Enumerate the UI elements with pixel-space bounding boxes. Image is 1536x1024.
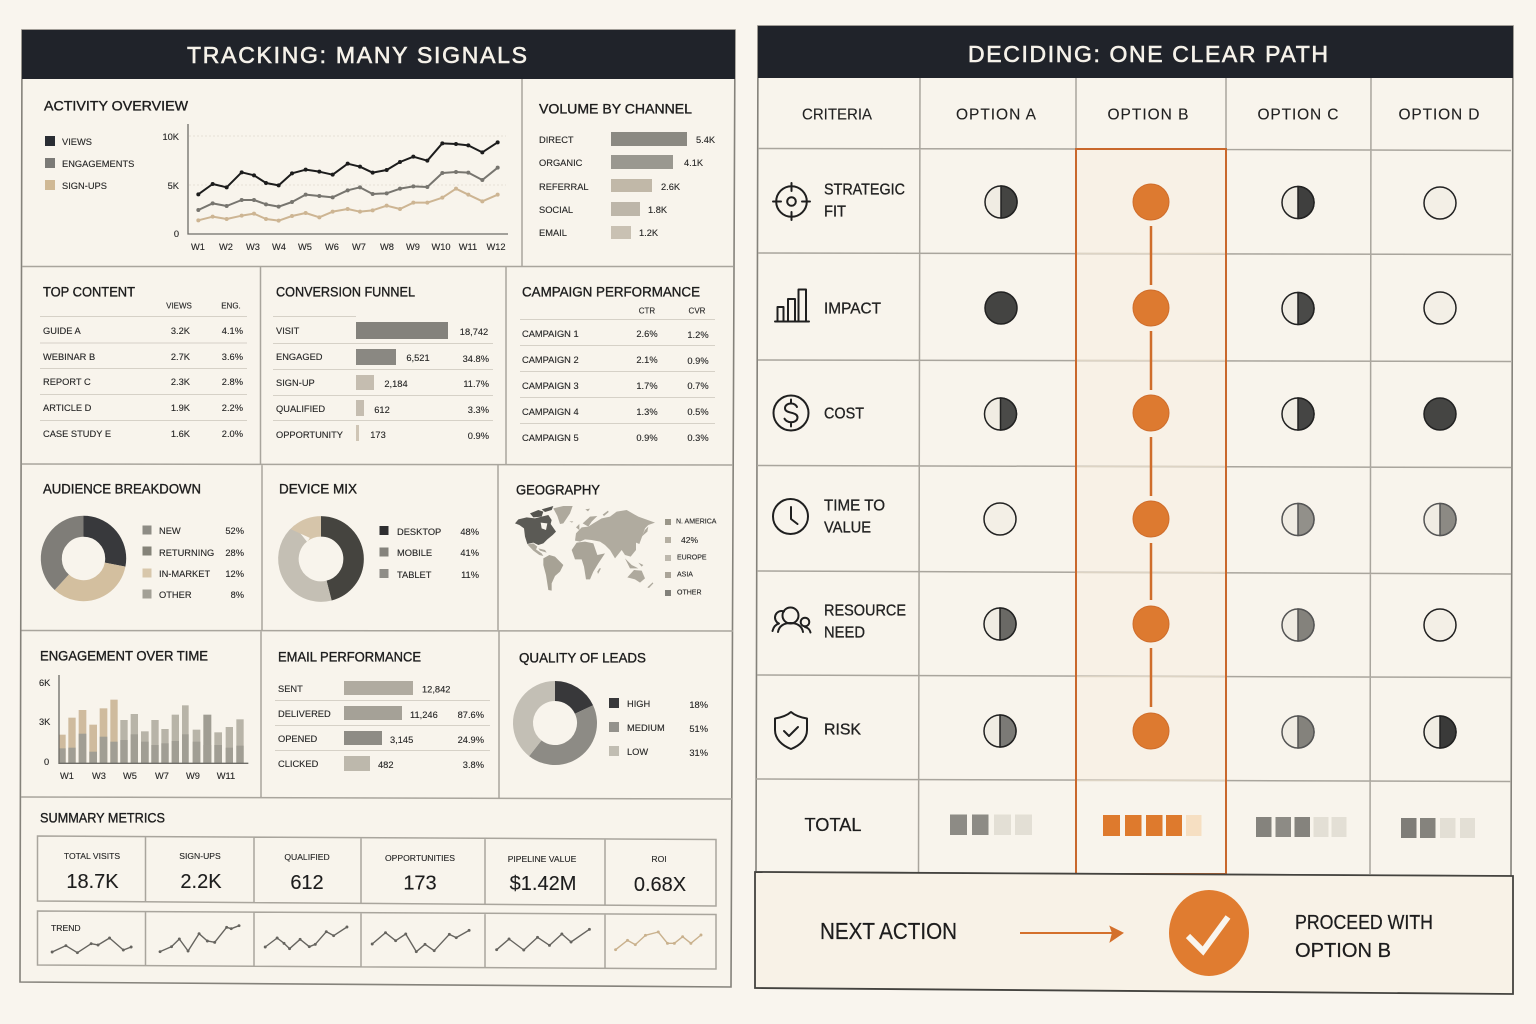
legend: audience: OTHER bbox=[159, 590, 192, 600]
path: option B connector bbox=[1150, 226, 1152, 707]
panel: tracking bbox=[20, 30, 735, 987]
line chart: activity: W3 bbox=[246, 242, 260, 252]
legend: activity: VIEWS bbox=[62, 137, 92, 147]
panel: email performance bbox=[275, 650, 490, 771]
panel: engagement over time bbox=[39, 648, 248, 781]
bars: email: DELIVERED bbox=[278, 709, 331, 719]
table: campaigns: 1.7% bbox=[636, 381, 658, 391]
legend: leads: HIGH bbox=[627, 699, 650, 709]
table: campaigns: 0.9% bbox=[687, 356, 709, 366]
funnel bars: 2,184 bbox=[384, 379, 408, 389]
label: cost: COST bbox=[824, 406, 864, 422]
icon: people bbox=[772, 608, 810, 632]
line chart: activity: W6 bbox=[325, 242, 339, 252]
line chart: activity: W5 bbox=[298, 242, 312, 252]
panel: conversion funnel bbox=[273, 284, 493, 441]
bars: channels: 5.4K bbox=[696, 135, 716, 145]
line chart: activity: W7 bbox=[352, 242, 366, 252]
label: strategic fit: STRATEGIC bbox=[824, 182, 905, 198]
donut: audience bbox=[38, 513, 129, 604]
funnel bars: 34.8% bbox=[463, 354, 489, 364]
metric tiles: 0.68X bbox=[634, 874, 686, 896]
bars: channels: EMAIL bbox=[539, 228, 567, 238]
column headers: OPTION A bbox=[956, 106, 1037, 124]
funnel bars: 6,521 bbox=[406, 353, 430, 363]
heading: deciding: DECIDING: ONE CLEAR PATH bbox=[968, 41, 1328, 67]
metric tiles: ROI bbox=[651, 854, 667, 864]
donut: leads bbox=[510, 678, 600, 768]
table: top content: 2.8% bbox=[222, 377, 243, 387]
criterion: impact bbox=[775, 290, 882, 322]
table: campaigns: 0.7% bbox=[687, 381, 709, 391]
legend: leads bbox=[609, 698, 708, 758]
legend: leads: 18% bbox=[689, 700, 708, 710]
legend: activity bbox=[45, 136, 134, 191]
metric tiles: QUALIFIED bbox=[284, 852, 330, 862]
icon: clock bbox=[773, 499, 808, 534]
legend: activity: SIGN-UPS bbox=[62, 181, 107, 191]
world map bbox=[515, 506, 655, 591]
table: top content: VIEWS bbox=[166, 302, 192, 310]
donut: device bbox=[275, 513, 367, 605]
legend: device: 11% bbox=[461, 570, 479, 580]
bar chart: engagement bbox=[39, 675, 248, 781]
legend: device: TABLET bbox=[397, 570, 432, 580]
bars: email: 12,842 bbox=[422, 684, 450, 694]
label: time to value: TIME TO bbox=[824, 498, 885, 514]
line chart: activity bbox=[162, 124, 508, 252]
criterion: risk bbox=[775, 712, 862, 749]
legend: audience: 8% bbox=[231, 590, 244, 600]
icon: dollar bbox=[774, 396, 808, 430]
rating dots: option B bbox=[1133, 184, 1169, 749]
table: top content: 3.2K bbox=[171, 326, 191, 336]
legend: audience: RETURNING bbox=[159, 548, 214, 558]
legend: geography: 42% bbox=[681, 535, 698, 545]
bars: email bbox=[275, 681, 490, 771]
funnel bars: QUALIFIED bbox=[276, 404, 325, 414]
table: campaigns: 1.3% bbox=[636, 407, 658, 417]
table: campaigns: 2.6% bbox=[636, 329, 658, 339]
line chart: activity: W1 bbox=[191, 242, 205, 252]
criterion: resource need bbox=[772, 602, 906, 642]
label: resource need: NEED bbox=[824, 624, 865, 642]
panel: volume by channel bbox=[539, 102, 716, 239]
funnel bars: 3.3% bbox=[468, 405, 489, 415]
funnel bars: SIGN-UP bbox=[276, 378, 315, 388]
label: resource need: RESOURCE bbox=[824, 602, 906, 620]
label: risk: RISK bbox=[824, 722, 862, 738]
legend: audience: 52% bbox=[225, 526, 244, 536]
metric tiles bbox=[38, 836, 716, 906]
table: top content: 2.3K bbox=[171, 377, 191, 387]
label: strategic fit bbox=[824, 182, 905, 220]
line chart: activity: W9 bbox=[406, 242, 420, 252]
decision grid lines bbox=[756, 78, 1511, 874]
table: campaigns: CTR bbox=[639, 306, 655, 316]
table: top content: 2.2% bbox=[222, 403, 243, 413]
table: top content: ENG. bbox=[221, 302, 241, 310]
legend: geography: OTHER bbox=[677, 590, 702, 596]
legend: audience: 28% bbox=[225, 548, 244, 558]
funnel bars bbox=[273, 316, 493, 441]
metric tiles: OPPORTUNITIES bbox=[385, 853, 455, 863]
table: top content: GUIDE A bbox=[43, 326, 82, 336]
recommendation text bbox=[1295, 912, 1433, 962]
legend: leads: 51% bbox=[689, 724, 708, 734]
legend: geography: EUROPE bbox=[677, 554, 707, 562]
highlight column fill: option B bbox=[1076, 149, 1226, 780]
trend sparklines: TREND bbox=[51, 923, 81, 933]
table: campaigns: 0.9% bbox=[636, 433, 658, 443]
column headers bbox=[802, 106, 1480, 124]
bars: channels: 2.6K bbox=[661, 182, 681, 192]
legend: leads: 31% bbox=[689, 748, 708, 758]
heading: volume by channel: VOLUME BY CHANNEL bbox=[539, 102, 693, 116]
bars: channels: 4.1K bbox=[684, 158, 704, 168]
legend: audience bbox=[142, 526, 244, 600]
heading: geography: GEOGRAPHY bbox=[516, 482, 600, 498]
legend: geography: ASIA bbox=[677, 572, 693, 578]
table: campaigns: 1.2% bbox=[687, 330, 709, 340]
bar chart: engagement: W3 bbox=[92, 771, 106, 781]
column headers: OPTION B bbox=[1108, 106, 1188, 124]
metric tiles: 18.7K bbox=[66, 871, 119, 893]
panel: campaign performance bbox=[520, 284, 715, 443]
panel: geography bbox=[515, 482, 717, 596]
icon: shield bbox=[775, 712, 807, 749]
table: campaigns: 0.3% bbox=[687, 433, 709, 443]
score: option A bbox=[950, 814, 1032, 835]
metric tiles: SIGN-UPS bbox=[179, 851, 221, 861]
legend: device: DESKTOP bbox=[397, 527, 441, 537]
bar chart: engagement: W9 bbox=[186, 771, 200, 781]
legend: geography bbox=[665, 518, 717, 596]
panel: audience breakdown bbox=[38, 482, 244, 604]
line chart: activity: W4 bbox=[272, 242, 286, 252]
legend: geography: N. AMERICA bbox=[676, 518, 717, 526]
bars: email: 3.8% bbox=[463, 760, 484, 770]
table: campaigns: 0.5% bbox=[687, 407, 709, 417]
tracking header bar bbox=[22, 30, 735, 79]
legend: device bbox=[380, 526, 479, 580]
table: top content: CASE STUDY E bbox=[43, 429, 111, 439]
bar chart: engagement: 3K bbox=[39, 717, 51, 727]
bars: channels bbox=[539, 132, 716, 239]
funnel bars: OPPORTUNITY bbox=[276, 430, 343, 440]
table: campaigns: CAMPAIGN 1 bbox=[522, 329, 579, 339]
recommendation text: PROCEED WITH bbox=[1295, 912, 1433, 934]
bar chart: engagement: W1 bbox=[60, 771, 74, 781]
table: campaigns bbox=[520, 306, 715, 443]
panel: summary metrics bbox=[38, 810, 716, 969]
bars: channels: DIRECT bbox=[539, 135, 574, 145]
table: campaigns: CAMPAIGN 2 bbox=[522, 355, 579, 365]
score: option D bbox=[1401, 818, 1475, 838]
heading: conversion funnel: CONVERSION FUNNEL bbox=[276, 284, 415, 300]
table: top content: 2.7K bbox=[171, 352, 191, 362]
column headers: CRITERIA bbox=[802, 106, 873, 124]
panel: top content bbox=[40, 284, 247, 439]
table: top content: 3.6% bbox=[222, 352, 243, 362]
line chart: activity: W8 bbox=[380, 242, 394, 252]
arrow bbox=[1020, 928, 1122, 940]
line chart: activity: W12 bbox=[486, 242, 506, 252]
column headers: OPTION C bbox=[1258, 106, 1338, 124]
heading: device mix: DEVICE MIX bbox=[279, 482, 357, 496]
table: top content: 4.1% bbox=[222, 326, 243, 336]
score: option C bbox=[1256, 817, 1346, 837]
bars: channels: SOCIAL bbox=[539, 205, 573, 215]
table: top content: WEBINAR B bbox=[43, 352, 95, 362]
line chart: activity: W10 bbox=[431, 242, 451, 252]
table: campaigns: 2.1% bbox=[636, 355, 658, 365]
funnel bars: ENGAGED bbox=[276, 352, 323, 362]
line chart: activity: 5K bbox=[168, 181, 180, 191]
heading: campaign performance: CAMPAIGN PERFORMANCE bbox=[522, 284, 700, 300]
harvey balls: option D bbox=[1424, 187, 1456, 748]
table: top content: 1.9K bbox=[171, 403, 191, 413]
funnel bars: VISIT bbox=[276, 326, 300, 336]
label: time to value bbox=[824, 498, 885, 536]
bars: email: SENT bbox=[278, 684, 303, 694]
table: campaigns: CAMPAIGN 4 bbox=[522, 407, 579, 417]
heading: audience breakdown: AUDIENCE BREAKDOWN bbox=[43, 482, 201, 496]
panel: deciding bbox=[756, 26, 1513, 876]
bar chart: engagement: W5 bbox=[123, 771, 137, 781]
bars: channels: REFERRAL bbox=[539, 182, 589, 192]
panel: next action bbox=[755, 872, 1513, 994]
table: campaigns: CVR bbox=[689, 306, 706, 316]
recommendation text: OPTION B bbox=[1295, 940, 1391, 962]
legend: audience: 12% bbox=[225, 569, 244, 579]
table: campaigns: CAMPAIGN 5 bbox=[522, 433, 579, 443]
bar chart: engagement: W7 bbox=[155, 771, 169, 781]
icon: check badge bbox=[1169, 890, 1249, 976]
panel: activity overview bbox=[44, 98, 508, 252]
label: next action: NEXT ACTION bbox=[820, 918, 957, 944]
legend: device: 48% bbox=[460, 527, 479, 537]
line chart: activity: 10K bbox=[162, 132, 180, 142]
legend: device: MOBILE bbox=[397, 548, 432, 558]
bars: email: 482 bbox=[378, 760, 394, 770]
score: option B bbox=[1103, 815, 1202, 836]
bars: email: 24.9% bbox=[458, 735, 484, 745]
criterion: time to value bbox=[773, 498, 885, 536]
line chart: activity: W11 bbox=[459, 242, 477, 252]
table: top content: 2.0% bbox=[222, 429, 243, 439]
legend: audience: IN-MARKET bbox=[159, 569, 210, 579]
harvey balls: option A bbox=[984, 186, 1017, 747]
metric tiles: PIPELINE VALUE bbox=[508, 854, 577, 864]
heading: tracking: TRACKING: MANY SIGNALS bbox=[187, 42, 527, 68]
metric tiles: TOTAL VISITS bbox=[64, 851, 120, 861]
harvey balls: option C bbox=[1282, 186, 1314, 748]
label: total: TOTAL bbox=[804, 815, 862, 835]
funnel bars: 612 bbox=[374, 405, 390, 415]
label: strategic fit: FIT bbox=[824, 204, 846, 220]
legend: leads: LOW bbox=[627, 747, 648, 757]
table: top content: REPORT C bbox=[43, 377, 91, 387]
heading: top content: TOP CONTENT bbox=[43, 284, 135, 300]
metric tiles: 612 bbox=[290, 872, 324, 894]
label: time to value: VALUE bbox=[824, 520, 871, 536]
legend: device: 41% bbox=[460, 548, 479, 558]
bars: email: 11,246 bbox=[410, 710, 438, 720]
funnel bars: 11.7% bbox=[463, 379, 489, 389]
heading: activity overview: ACTIVITY OVERVIEW bbox=[44, 98, 188, 114]
funnel bars: 173 bbox=[370, 430, 386, 440]
heading: engagement over time: ENGAGEMENT OVER TIME bbox=[40, 648, 208, 664]
bars: email: 87.6% bbox=[458, 710, 484, 720]
line chart: activity: 0 bbox=[174, 229, 179, 239]
panel grid lines bbox=[21, 79, 733, 799]
funnel bars: 18,742 bbox=[460, 327, 488, 337]
metric tiles: 173 bbox=[403, 872, 437, 894]
table: campaigns: CAMPAIGN 3 bbox=[522, 381, 579, 391]
trend sparklines bbox=[38, 911, 716, 969]
icon: bars bbox=[775, 290, 809, 322]
icon: target bbox=[773, 183, 810, 220]
bar chart: engagement: W11 bbox=[217, 771, 235, 781]
panel: device mix bbox=[275, 482, 479, 605]
column headers: OPTION D bbox=[1398, 106, 1480, 124]
bar chart: engagement: 6K bbox=[39, 678, 51, 688]
metric tiles: 2.2K bbox=[180, 871, 222, 893]
legend: audience: NEW bbox=[159, 526, 181, 536]
funnel bars: 0.9% bbox=[468, 431, 489, 441]
panel: quality of leads bbox=[510, 650, 708, 768]
label: impact: IMPACT bbox=[824, 300, 882, 318]
label: resource need bbox=[824, 602, 906, 642]
table: top content bbox=[40, 302, 247, 439]
criterion: strategic fit bbox=[773, 182, 905, 220]
heading: quality of leads: QUALITY OF LEADS bbox=[519, 650, 646, 666]
bars: channels: ORGANIC bbox=[539, 158, 583, 168]
highlight column frame: option B bbox=[1076, 149, 1226, 874]
legend: leads: MEDIUM bbox=[627, 723, 665, 733]
criterion: cost bbox=[774, 396, 864, 430]
heading: email performance: EMAIL PERFORMANCE bbox=[278, 650, 421, 664]
metric tiles: $1.42M bbox=[510, 873, 576, 895]
bars: channels: 1.2K bbox=[639, 228, 659, 238]
legend: activity: ENGAGEMENTS bbox=[62, 159, 134, 169]
line chart: activity: W2 bbox=[219, 242, 233, 252]
bar chart: engagement: 0 bbox=[44, 757, 49, 767]
table: top content: ARTICLE D bbox=[43, 403, 92, 413]
heading: summary metrics: SUMMARY METRICS bbox=[40, 810, 165, 826]
bars: email: OPENED bbox=[278, 734, 318, 744]
deciding header bar bbox=[758, 26, 1513, 78]
bars: channels: 1.8K bbox=[648, 205, 668, 215]
table: top content: 1.6K bbox=[171, 429, 191, 439]
bars: email: CLICKED bbox=[278, 759, 319, 769]
bars: email: 3,145 bbox=[390, 735, 413, 745]
